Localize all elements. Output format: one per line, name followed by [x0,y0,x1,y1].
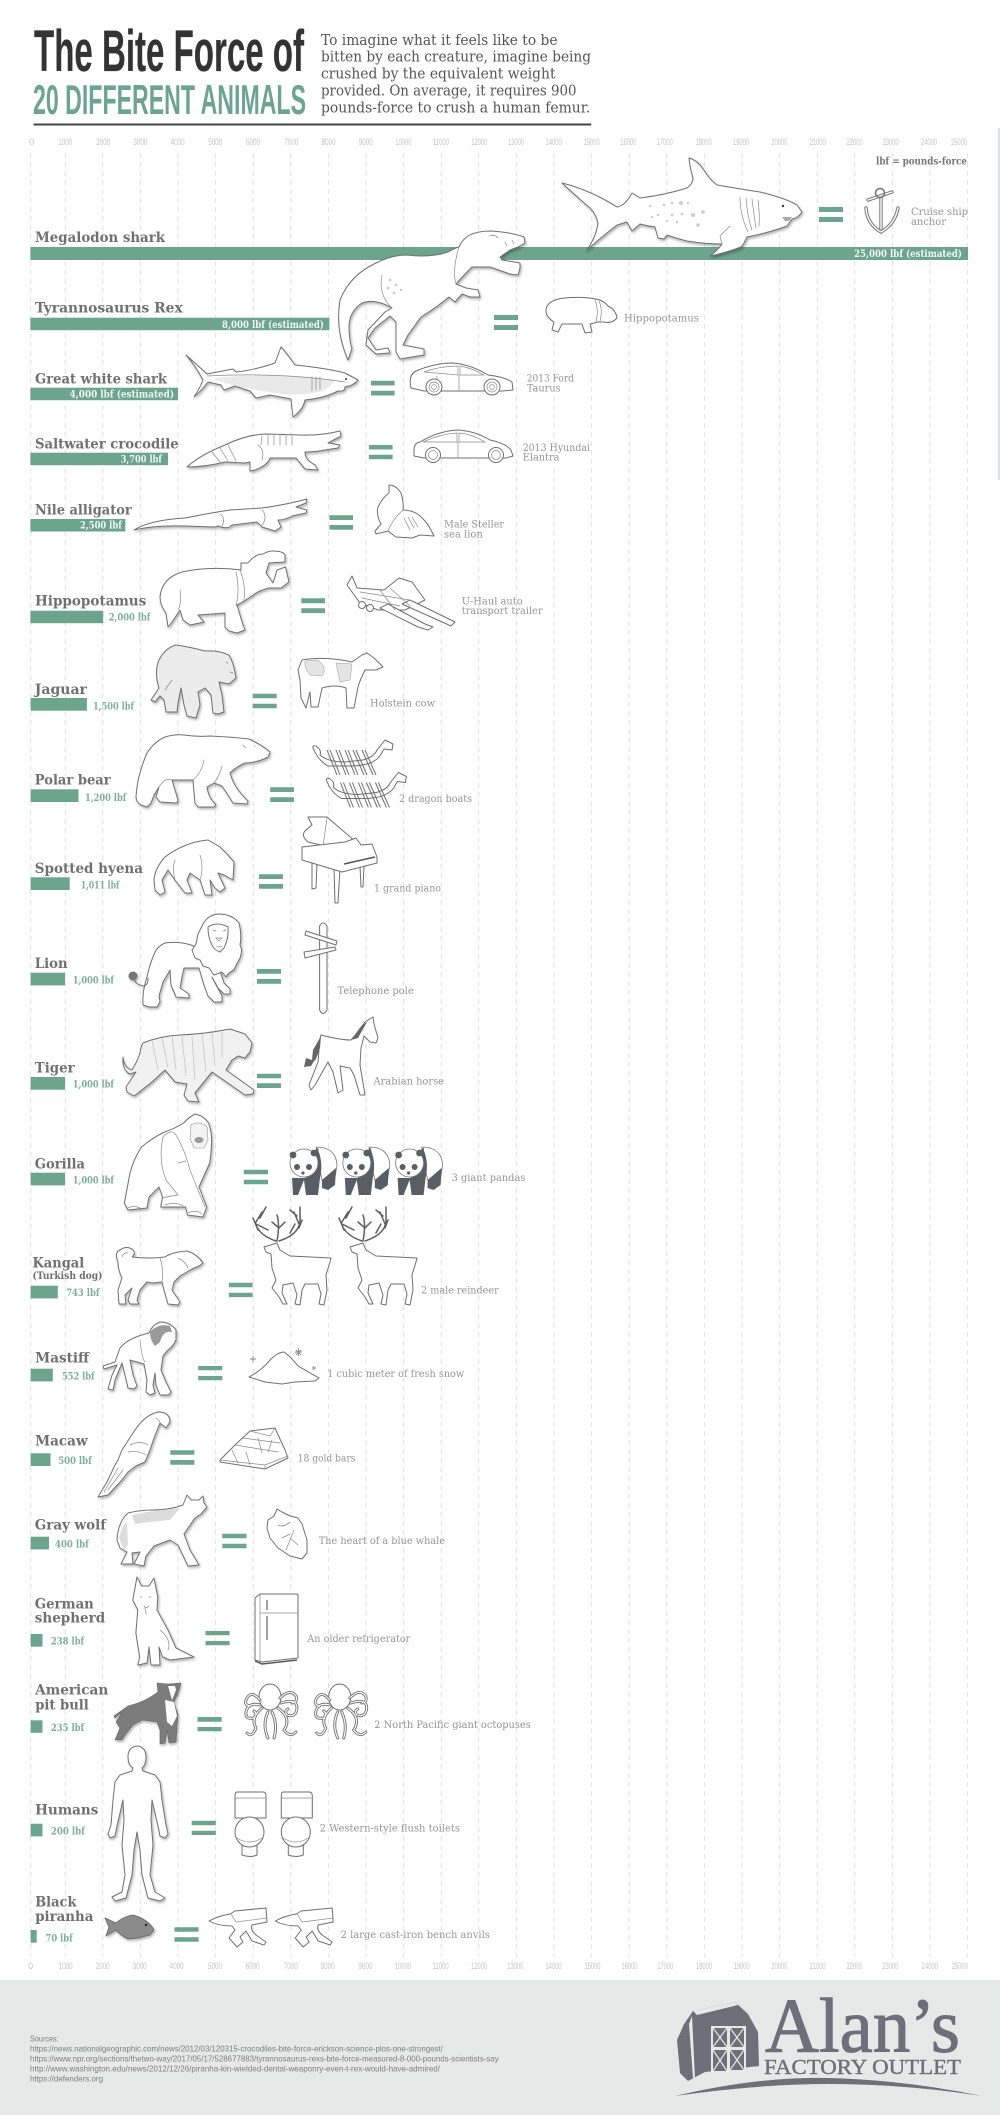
comparison label: Cruise ship [911,207,968,218]
comparison label: 3 giant pandas [452,1173,525,1184]
comparison label: Hippopotamus [624,314,699,325]
panel: Tyrannosaurus Rex [30,231,699,360]
bottom axis labels: 12000 [471,1961,487,1971]
bottom axis labels: 20000 [771,1961,787,1971]
bar [31,789,79,802]
icon: human [108,1746,168,1901]
icon: telephone pole [304,923,337,1014]
label: Saltwater crocodile [35,436,179,452]
bottom axis labels: 3000 [133,1961,147,1971]
icon: 3 giant pandas [290,1146,443,1195]
top axis labels: 25000 [951,137,967,147]
top axis labels: 5000 [208,137,222,147]
label: Great white shark [35,371,168,387]
bottom axis labels: 16000 [622,1961,638,1971]
equals [270,787,294,802]
bottom axis labels: 14000 [546,1961,562,1971]
comparison label: 2 dragon boats [399,794,472,805]
value: 1,500 lbf [93,701,135,712]
value: 200 lbf [51,1827,85,1838]
bar [31,1824,42,1836]
comparison label: 18 gold bars [298,1453,356,1464]
icon: Arabian horse [304,1017,378,1095]
value: 400 lbf [55,1539,89,1550]
top axis labels: 1000 [58,137,72,147]
icon: 2013 Ford Taurus [410,363,513,395]
label: Macaw [35,1434,88,1450]
icon: lion [128,914,242,1007]
bar [31,1720,42,1733]
comparison label [523,443,590,464]
equals [819,207,843,222]
bottom axis labels: 0 [28,1961,33,1971]
bottom axis labels: 6000 [246,1961,260,1971]
bottom axis labels: 23000 [882,1961,898,1971]
panel: Gray wolf [31,1495,445,1566]
panel: Jaguar [31,645,435,718]
intro text: To imagine what it feels like to be [321,33,558,49]
bottom axis labels: 18000 [696,1961,712,1971]
panel: Megalodon shark [30,158,968,260]
label: Tiger [35,1061,75,1077]
comparison label: 2 Western-style flush toilets [320,1823,460,1834]
bar [31,1634,42,1647]
bar [31,1286,58,1298]
top axis labels: 0 [29,137,34,147]
icon: megalodon [562,158,802,256]
top axis labels: 20000 [771,137,787,147]
sources: https://www.npr.org/sections/thetwo-way/2017/05/17/528677883/tyrannosaurus-rexs-bite-force-measured-8-000-pounds-scientists-say [30,2054,499,2064]
bar [30,388,178,400]
label: Tyrannosaurus Rex [35,301,184,317]
logo: Alan's Factory Outlet [675,1983,982,2096]
icon: mastiff [103,1322,176,1395]
top axis labels: 10000 [395,137,411,147]
panel: Mastiff [31,1322,465,1395]
value: 4,000 lbf (estimated) [70,390,174,400]
icon: gorilla [124,1114,212,1217]
top axis labels: 7000 [284,137,298,147]
comparison label: 2013 Ford [527,374,575,385]
label: Kangal [32,1255,84,1271]
comparison label: Elantra [523,453,560,464]
equals [244,1170,268,1184]
bottom axis labels: 11000 [433,1961,449,1971]
equals [192,1821,216,1835]
bar [30,247,968,260]
panel: Tiger [31,1017,444,1102]
equals [301,598,325,613]
top axis labels: 16000 [620,137,636,147]
top axis labels: 22000 [847,137,863,147]
intro text: bitten by each creature, imagine being [321,50,591,66]
top axis labels: 19000 [733,137,749,147]
label: Gorilla [35,1157,85,1173]
icon: anchor [866,188,898,232]
icon: german shepherd [133,1577,194,1665]
comparison label: transport trailer [462,606,543,617]
label: German [35,1596,94,1612]
panel: Humans [31,1746,460,1901]
title: The Bite Force of [34,19,304,84]
equals [253,694,277,708]
icon: hyena [154,840,234,895]
icon: U-Haul trailer [347,576,455,630]
equals [369,445,393,459]
panel: Kangal [31,1207,499,1305]
label: American [34,1683,108,1699]
top axis labels: 12000 [471,137,487,147]
value: 552 lbf [62,1371,95,1382]
icon: sea lion [375,485,434,538]
panel: Spotted hyena [31,817,441,903]
equals [371,381,395,396]
value: 1,000 lbf [73,1175,115,1186]
panel: Nile alligator [30,485,504,540]
value: 3,700 lbf [121,455,163,466]
bar [30,318,329,330]
top axis labels: 18000 [696,137,712,147]
bar [30,611,103,623]
icon: hippopotamus [546,297,617,333]
intro text: provided. On average, it requires 900 [321,84,576,100]
equals [257,1074,281,1088]
panel: Great white shark [30,347,575,417]
top axis labels: 8000 [322,137,336,147]
top axis labels: 24000 [921,137,937,147]
value: 235 lbf [51,1723,85,1734]
intro text [321,33,591,117]
value: 743 lbf [66,1288,100,1299]
comparison label: Taurus [527,384,561,395]
sources: https://news.nationalgeographic.com/news/2012/03/120315-crocodiles-bite-force-erickson-science-plos-one-strongest/ [30,2044,444,2054]
sublabel: (Turkish dog) [32,1271,102,1282]
icon: piranha [105,1915,154,1939]
panel: Macaw [31,1412,355,1497]
top axis labels: 21000 [810,137,826,147]
icon: gold bars [220,1428,288,1469]
bottom axis labels: 5000 [208,1961,222,1971]
icon: barn [677,2002,759,2081]
icon: whale heart [267,1509,307,1559]
bottom axis labels: 25000 [952,1961,968,1971]
bar [31,1173,65,1185]
icon: 2 octopuses [246,1684,367,1738]
top axis labels: 4000 [171,137,185,147]
icon: jaguar [151,645,236,718]
value: 238 lbf [51,1637,85,1648]
panel: Saltwater crocodile [30,430,590,471]
bottom axis labels: 10000 [395,1961,411,1971]
value: 1,000 lbf [73,975,115,986]
equals [174,1927,199,1942]
panel: Gorilla [31,1114,525,1217]
icon: macaw [98,1412,170,1497]
label: Nile alligator [35,502,133,518]
icon: 2 reindeer [253,1207,417,1305]
equals [494,315,518,330]
label: Spotted hyena [35,861,143,877]
value: 25,000 lbf (estimated) [854,249,962,260]
comparison label: 2013 Hyundai [523,443,590,454]
icon: gray wolf [117,1495,207,1566]
top axis labels: 23000 [883,137,899,147]
swoosh [675,2078,982,2096]
label: Black [35,1894,77,1910]
bar [31,1930,37,1943]
bar [31,1369,53,1381]
equals [206,1631,230,1645]
label: Jaguar [34,682,88,698]
sources: http://www.washington.edu/news/2012/12/26/piranha-kin-wielded-dental-weaponry-even-t-rex-would-have-admired/ [30,2064,441,2074]
bottom axis labels: 7000 [284,1961,298,1971]
label: Megalodon shark [35,230,166,246]
icon: kangal [116,1248,203,1305]
bar [31,973,65,985]
label: shepherd [35,1611,106,1627]
comparison label: Holstein cow [370,699,435,710]
comparison label [911,207,968,228]
equals [198,1717,222,1731]
value: 70 lbf [46,1933,73,1944]
top axis labels: 15000 [584,137,600,147]
legend: lbf: lbf = pounds-force [876,157,967,168]
header rule [34,124,591,126]
title [33,19,306,123]
comparison label: anchor [911,217,946,228]
label: Polar bear [35,773,111,789]
label: Hippopotamus [35,594,147,610]
value: 8,000 lbf (estimated) [222,320,324,331]
equals [198,1366,222,1380]
equals [222,1534,246,1548]
icon: grand piano [302,817,377,903]
icon: snow pile [249,1348,319,1384]
bottom axis labels: 24000 [922,1961,938,1971]
top axis labels: 2000 [96,137,110,147]
comparison label: The heart of a blue whale [319,1536,445,1547]
equals [329,515,353,530]
icon: great white shark [186,347,358,417]
equals [257,969,281,984]
icon: alligator [134,499,307,531]
value: 1,000 lbf [73,1080,115,1091]
footer panel [0,1980,1000,2115]
label [35,1596,106,1627]
bar [31,1077,65,1090]
bottom axis labels: 19000 [734,1961,750,1971]
panel: German shepherd [31,1577,410,1665]
top axis labels: 11000 [433,137,449,147]
comparison label: 2 male reindeer [421,1286,499,1297]
value: 1,200 lbf [85,793,127,804]
panel: Polar bear [31,735,472,808]
icon: refrigerator [255,1594,298,1664]
comparison label: sea lion [444,529,483,540]
comparison label [527,374,575,395]
sources: Sources: [30,2034,59,2044]
equals [229,1283,253,1297]
bottom axis labels: 13000 [507,1961,523,1971]
sources: https://defenders.org [30,2074,103,2084]
comparison label: Arabian horse [373,1077,444,1088]
comparison label: 2 large cast-iron bench anvils [341,1930,490,1941]
bottom axis labels [28,1961,968,1971]
label: Gray wolf [35,1517,107,1533]
label: Lion [35,956,68,972]
icon: t-rex [339,231,525,360]
icon: 2 toilets [235,1792,312,1856]
panel: Hippopotamus [30,551,543,633]
comparison label: Telephone pole [338,986,414,997]
intro text: crushed by the equivalent weight [321,66,556,82]
bar [31,698,87,711]
panel: Black piranha [31,1894,490,1947]
bottom axis labels: 21000 [810,1961,826,1971]
comparison label: Male Steller [444,520,504,531]
top axis labels: 14000 [546,137,562,147]
value: 2,500 lbf [80,521,122,532]
bar [31,877,70,890]
bar [30,453,168,465]
top axis labels: 3000 [133,137,147,147]
top axis labels: 6000 [246,137,260,147]
bar [31,1453,50,1466]
top axis labels: 13000 [508,137,524,147]
title: 20 DIFFERENT ANIMALS [33,76,306,123]
comparison label: 1 grand piano [374,883,441,894]
label: piranha [35,1909,94,1925]
bottom axis labels: 17000 [657,1961,673,1971]
label: pit bull [35,1697,89,1713]
icon: Holstein cow [298,653,383,708]
bottom axis labels: 1000 [59,1961,73,1971]
icon: dragon boats [313,740,406,808]
value: 500 lbf [58,1456,92,1467]
panel: Lion [31,914,414,1014]
comparison label: 1 cubic meter of fresh snow [327,1369,465,1380]
icon: hippo [160,551,289,633]
intro text: pounds-force to crush a human femur. [321,101,590,117]
top axis labels: 9000 [359,137,373,147]
bottom axis labels: 22000 [847,1961,863,1971]
equals [259,874,283,889]
label [35,1894,94,1925]
bar [31,1537,49,1549]
sources [30,2034,499,2084]
icon: crocodile [187,431,341,471]
top axis labels [29,137,967,147]
icon: polar bear [136,735,270,807]
label: Humans [35,1802,99,1818]
label [34,1683,108,1713]
wordmark: FACTORY OUTLET [764,2055,961,2079]
value: 1,011 lbf [81,880,120,891]
wordmark: Alan’s [765,1983,960,2069]
comparison label: 2 North Pacific giant octopuses [374,1720,531,1731]
bottom axis labels: 2000 [96,1961,110,1971]
icon: tiger [123,1029,254,1102]
comparison label: An older refrigerator [306,1634,410,1645]
bar [30,519,125,532]
icon: 2 anvils [209,1908,333,1947]
icon: pit bull [114,1683,181,1744]
label: Mastiff [35,1350,90,1366]
icon: 2013 Hyundai Elantra [414,430,513,462]
panel: American pit bull [31,1683,531,1744]
value: 2,000 lbf [109,612,151,623]
equals [170,1450,194,1465]
comparison label: U-Haul auto [462,596,523,607]
bottom axis labels: 4000 [170,1961,184,1971]
comparison label [462,596,543,617]
top axis labels: 17000 [657,137,673,147]
bottom axis labels: 9000 [358,1961,372,1971]
bottom axis labels: 15000 [584,1961,600,1971]
bottom axis labels: 8000 [321,1961,335,1971]
comparison label [444,520,504,540]
